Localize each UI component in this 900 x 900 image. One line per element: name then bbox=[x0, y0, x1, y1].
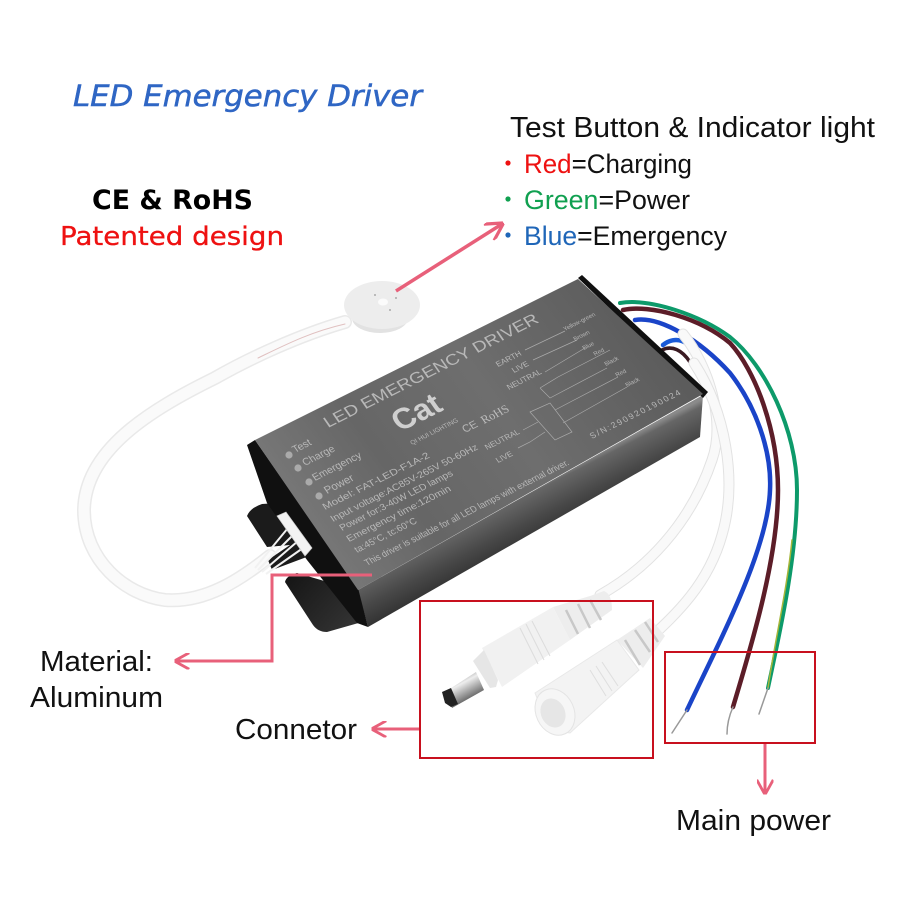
serial number: S/N:290920190024 bbox=[587, 388, 683, 441]
wiring diagram bbox=[483, 312, 642, 465]
arrow: connector bbox=[373, 728, 419, 730]
ribbon connector bbox=[255, 512, 312, 574]
specifications: ta:45°C, tc:60°C bbox=[352, 516, 420, 555]
indicator labels: Charge bbox=[300, 443, 338, 468]
indicator labels: Emergency bbox=[310, 449, 365, 483]
wiring diagram: Red bbox=[593, 348, 606, 358]
box left end cap bbox=[247, 440, 368, 627]
ribbon cable bbox=[84, 322, 345, 600]
indicator light legend: Blue=Emergency bbox=[524, 221, 728, 251]
wiring diagram: Black bbox=[625, 377, 642, 389]
indicator labels: Test bbox=[290, 437, 314, 455]
box side face bbox=[358, 395, 703, 627]
mounting foot: lower bbox=[285, 573, 362, 632]
box right end cap bbox=[578, 275, 708, 398]
product heading: LED EMERGENCY DRIVER bbox=[321, 311, 542, 431]
wiring diagram: LIVE bbox=[494, 449, 515, 465]
logo: QI HUI LIGHTING bbox=[409, 417, 460, 447]
red box: connector bbox=[420, 601, 653, 758]
wiring diagram: LIVE bbox=[510, 359, 531, 375]
indicator light legend: Test Button & Indicator light bbox=[510, 112, 875, 144]
indicator light legend: Red=Charging bbox=[524, 149, 692, 179]
face printing bbox=[285, 311, 683, 568]
DC female connector bbox=[528, 618, 665, 742]
wiring diagram: Brown bbox=[573, 330, 591, 343]
wiring diagram: Blue bbox=[582, 341, 596, 352]
white DC cables bbox=[600, 334, 729, 640]
arrow: test button bbox=[396, 224, 502, 291]
specifications: Emergency time:120min bbox=[344, 484, 454, 544]
wiring diagram: NEUTRAL bbox=[505, 367, 544, 392]
certification text: Patented design bbox=[60, 222, 284, 252]
title: LED Emergency Driver bbox=[73, 79, 424, 113]
label: material: Material: bbox=[40, 646, 153, 678]
label: material: Aluminum bbox=[30, 682, 163, 714]
certification text bbox=[60, 185, 284, 252]
wiring diagram: EARTH bbox=[494, 349, 523, 369]
wiring diagram: Red bbox=[615, 369, 628, 379]
certification text: CE & RoHS bbox=[92, 185, 253, 216]
wires: green, brown and blue leads bbox=[620, 302, 797, 734]
wiring diagram: NEUTRAL bbox=[483, 427, 522, 452]
wiring diagram: Yellow-green bbox=[563, 312, 597, 333]
specifications: Power for:3-40W LED lamps bbox=[337, 468, 456, 533]
label: connector: Connetor bbox=[235, 714, 357, 746]
box top face bbox=[255, 279, 703, 590]
certification marks: RoHS bbox=[478, 402, 512, 426]
arrow: material bbox=[176, 575, 372, 661]
indicator light legend bbox=[505, 112, 875, 251]
test button disc bbox=[344, 281, 420, 333]
driver box bbox=[247, 275, 708, 632]
indicator light legend: Green=Power bbox=[524, 185, 690, 215]
specifications: This driver is suitable for all LED lamps with external driver. bbox=[362, 458, 572, 568]
mounting foot: upper bbox=[247, 503, 312, 570]
specifications: Model: FAT-LED-F1A-2 bbox=[320, 451, 432, 512]
red box: main power bbox=[665, 652, 815, 743]
DC male connector bbox=[442, 591, 612, 708]
certification marks bbox=[460, 402, 512, 435]
indicator labels: Power bbox=[322, 472, 357, 496]
wiring diagram: Black bbox=[604, 356, 621, 368]
indicator labels bbox=[285, 437, 365, 500]
certification marks: CE bbox=[460, 419, 480, 435]
specifications: Input voltage:AC85V-265V 50-60Hz bbox=[328, 442, 481, 524]
label: material bbox=[30, 646, 163, 714]
logo: Cat bbox=[384, 387, 449, 438]
label: main power: Main power bbox=[676, 805, 831, 837]
arrow: main power bbox=[764, 744, 766, 793]
